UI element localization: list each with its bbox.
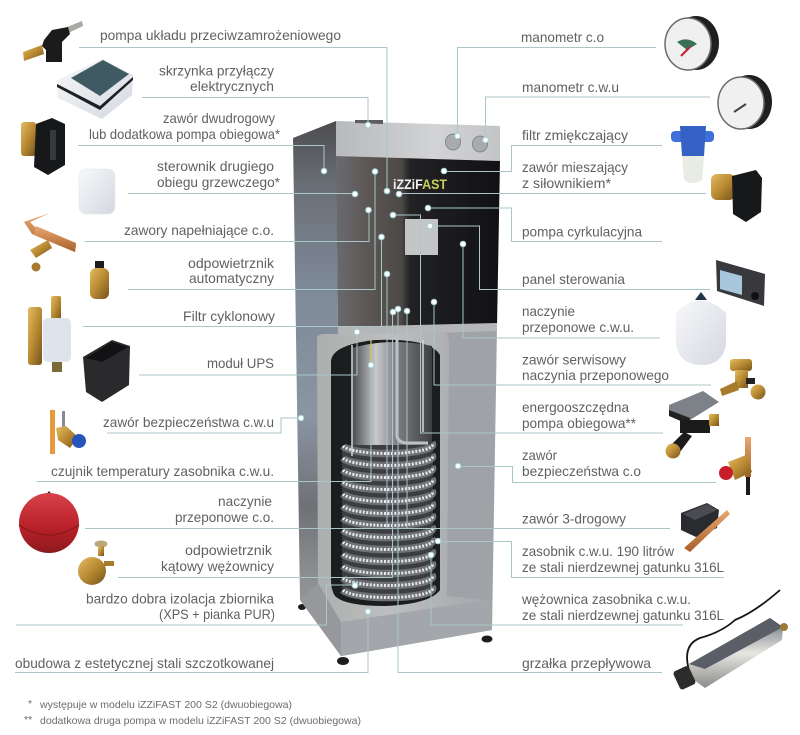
left labels: obiegu grzewczego* (157, 174, 281, 190)
icon: softening filter (671, 126, 714, 183)
right labels: filtr zmiękczający (522, 127, 628, 143)
icon: electrical junction box (57, 59, 133, 119)
top connector (355, 120, 383, 124)
right labels: naczynia przeponowego (522, 367, 669, 383)
logo: iZZiFAST (393, 176, 447, 192)
right labels (521, 29, 724, 671)
coil pipes (343, 443, 433, 598)
right labels: panel sterowania (522, 271, 625, 287)
right labels: manometr c.o (521, 29, 604, 45)
right labels: naczynie (522, 303, 575, 319)
steel front body (338, 327, 497, 656)
icon: antifreeze pump (23, 21, 83, 62)
footnotes: dodatkowa druga pompa w modelu iZZiFAST 200 S2 (dwuobiegowa) (40, 715, 361, 727)
icon: three-way valve (681, 503, 730, 552)
icon: service valve (720, 359, 766, 400)
right labels: energooszczędna (522, 399, 629, 415)
footnotes (24, 698, 361, 727)
left labels: obudowa z estetycznej stali szczotkowanej (15, 655, 274, 671)
right labels: zawór serwisowy (522, 352, 626, 368)
leader lines (15, 48, 724, 672)
icon: two-way valve (21, 118, 65, 175)
yellow sensor wire (370, 340, 372, 364)
left labels: czujnik temperatury zasobnika c.w.u. (51, 463, 274, 479)
left labels: pompa układu przeciwzamrożeniowego (100, 27, 341, 43)
heat pump unit cutaway (293, 120, 500, 665)
right labels: grzałka przepływowa (522, 655, 651, 671)
icon: white room controller (79, 169, 115, 214)
icon: flow heater (673, 590, 788, 690)
control panel plate (405, 219, 438, 255)
right labels: manometr c.w.u (522, 79, 619, 95)
footnotes: * (28, 698, 32, 710)
lighter steel strip under glass (338, 323, 497, 336)
left side panel (293, 121, 341, 656)
vertical sensor tubes (352, 340, 423, 456)
left labels: skrzynka przyłączy (159, 62, 274, 78)
left labels: automatyczny (189, 270, 274, 286)
right labels: zawór (522, 447, 557, 463)
tank cavity (331, 340, 440, 606)
callout dots (298, 122, 488, 614)
left labels: naczynie (218, 493, 272, 509)
inner steel cylinder (352, 342, 432, 450)
icon: DHW pressure gauge (718, 75, 772, 129)
left labels: zawory napełniające c.o. (124, 222, 274, 238)
unit feet (298, 604, 492, 665)
left labels: bardzo dobra izolacja zbiornika (86, 590, 274, 606)
top grey front panel (336, 121, 500, 161)
left labels: odpowietrznik (188, 255, 275, 271)
lower steel front panel (341, 600, 492, 656)
left labels: moduł UPS (207, 355, 274, 371)
right labels: ze stali nierdzewnej gatunku 316L (522, 607, 724, 623)
footnotes: ** (24, 714, 32, 726)
icon: angle air vent (78, 540, 114, 585)
icon: automatic air vent (90, 261, 109, 299)
icon: c.o. pressure gauge (665, 16, 719, 70)
insulation section (317, 333, 490, 656)
left labels: przeponowe c.o. (175, 509, 274, 525)
left labels: zawór dwudrogowy (163, 110, 275, 126)
icon: c.o. safety valve (719, 437, 752, 495)
right labels: z siłownikiem* (522, 175, 612, 191)
icon: cyclone filter (28, 296, 71, 372)
left labels: lub dodatkowa pompa obiegowa* (89, 126, 281, 142)
left labels: zawór bezpieczeństwa c.w.u (103, 414, 274, 430)
left labels: kątowy wężownicy (161, 558, 274, 574)
icon: mixing valve with actuator (711, 170, 762, 222)
right labels: wężownica zasobnika c.w.u. (521, 591, 691, 607)
icon: white expansion vessel (676, 292, 726, 365)
left labels: odpowietrznik (185, 542, 273, 558)
left labels (15, 27, 341, 671)
left labels: Filtr cyklonowy (183, 308, 275, 324)
icon: copper fill valves (24, 213, 76, 272)
icon: energy-saving pump (666, 391, 719, 458)
gauges on unit (446, 134, 488, 152)
right labels: zawór 3-drogowy (522, 510, 626, 526)
icon: UPS battery (83, 340, 130, 402)
central riser pipe (397, 336, 428, 443)
right labels: przeponowe c.w.u. (522, 319, 634, 335)
left labels: elektrycznych (190, 78, 274, 94)
right labels: zawór mieszający (522, 159, 628, 175)
footnotes: występuje w modelu iZZiFAST 200 S2 (dwuobiegowa) (39, 699, 292, 711)
right labels: ze stali nierdzewnej gatunku 316L (522, 559, 724, 575)
black glass front panel (336, 156, 500, 331)
coil backing (342, 445, 433, 595)
icon: red expansion vessel (19, 491, 79, 553)
icon: control panel (716, 260, 765, 306)
right labels: zasobnik c.w.u. 190 litrów (522, 543, 675, 559)
icon: DHW safety valve (50, 410, 86, 454)
right labels: pompa obiegowa** (522, 415, 637, 431)
left labels: sterownik drugiego (157, 158, 274, 174)
bevelled left corner (300, 583, 341, 656)
right labels: pompa cyrkulacyjna (522, 224, 642, 240)
left labels: (XPS + pianka PUR) (159, 606, 275, 622)
right labels: bezpieczeństwa c.o (522, 463, 641, 479)
